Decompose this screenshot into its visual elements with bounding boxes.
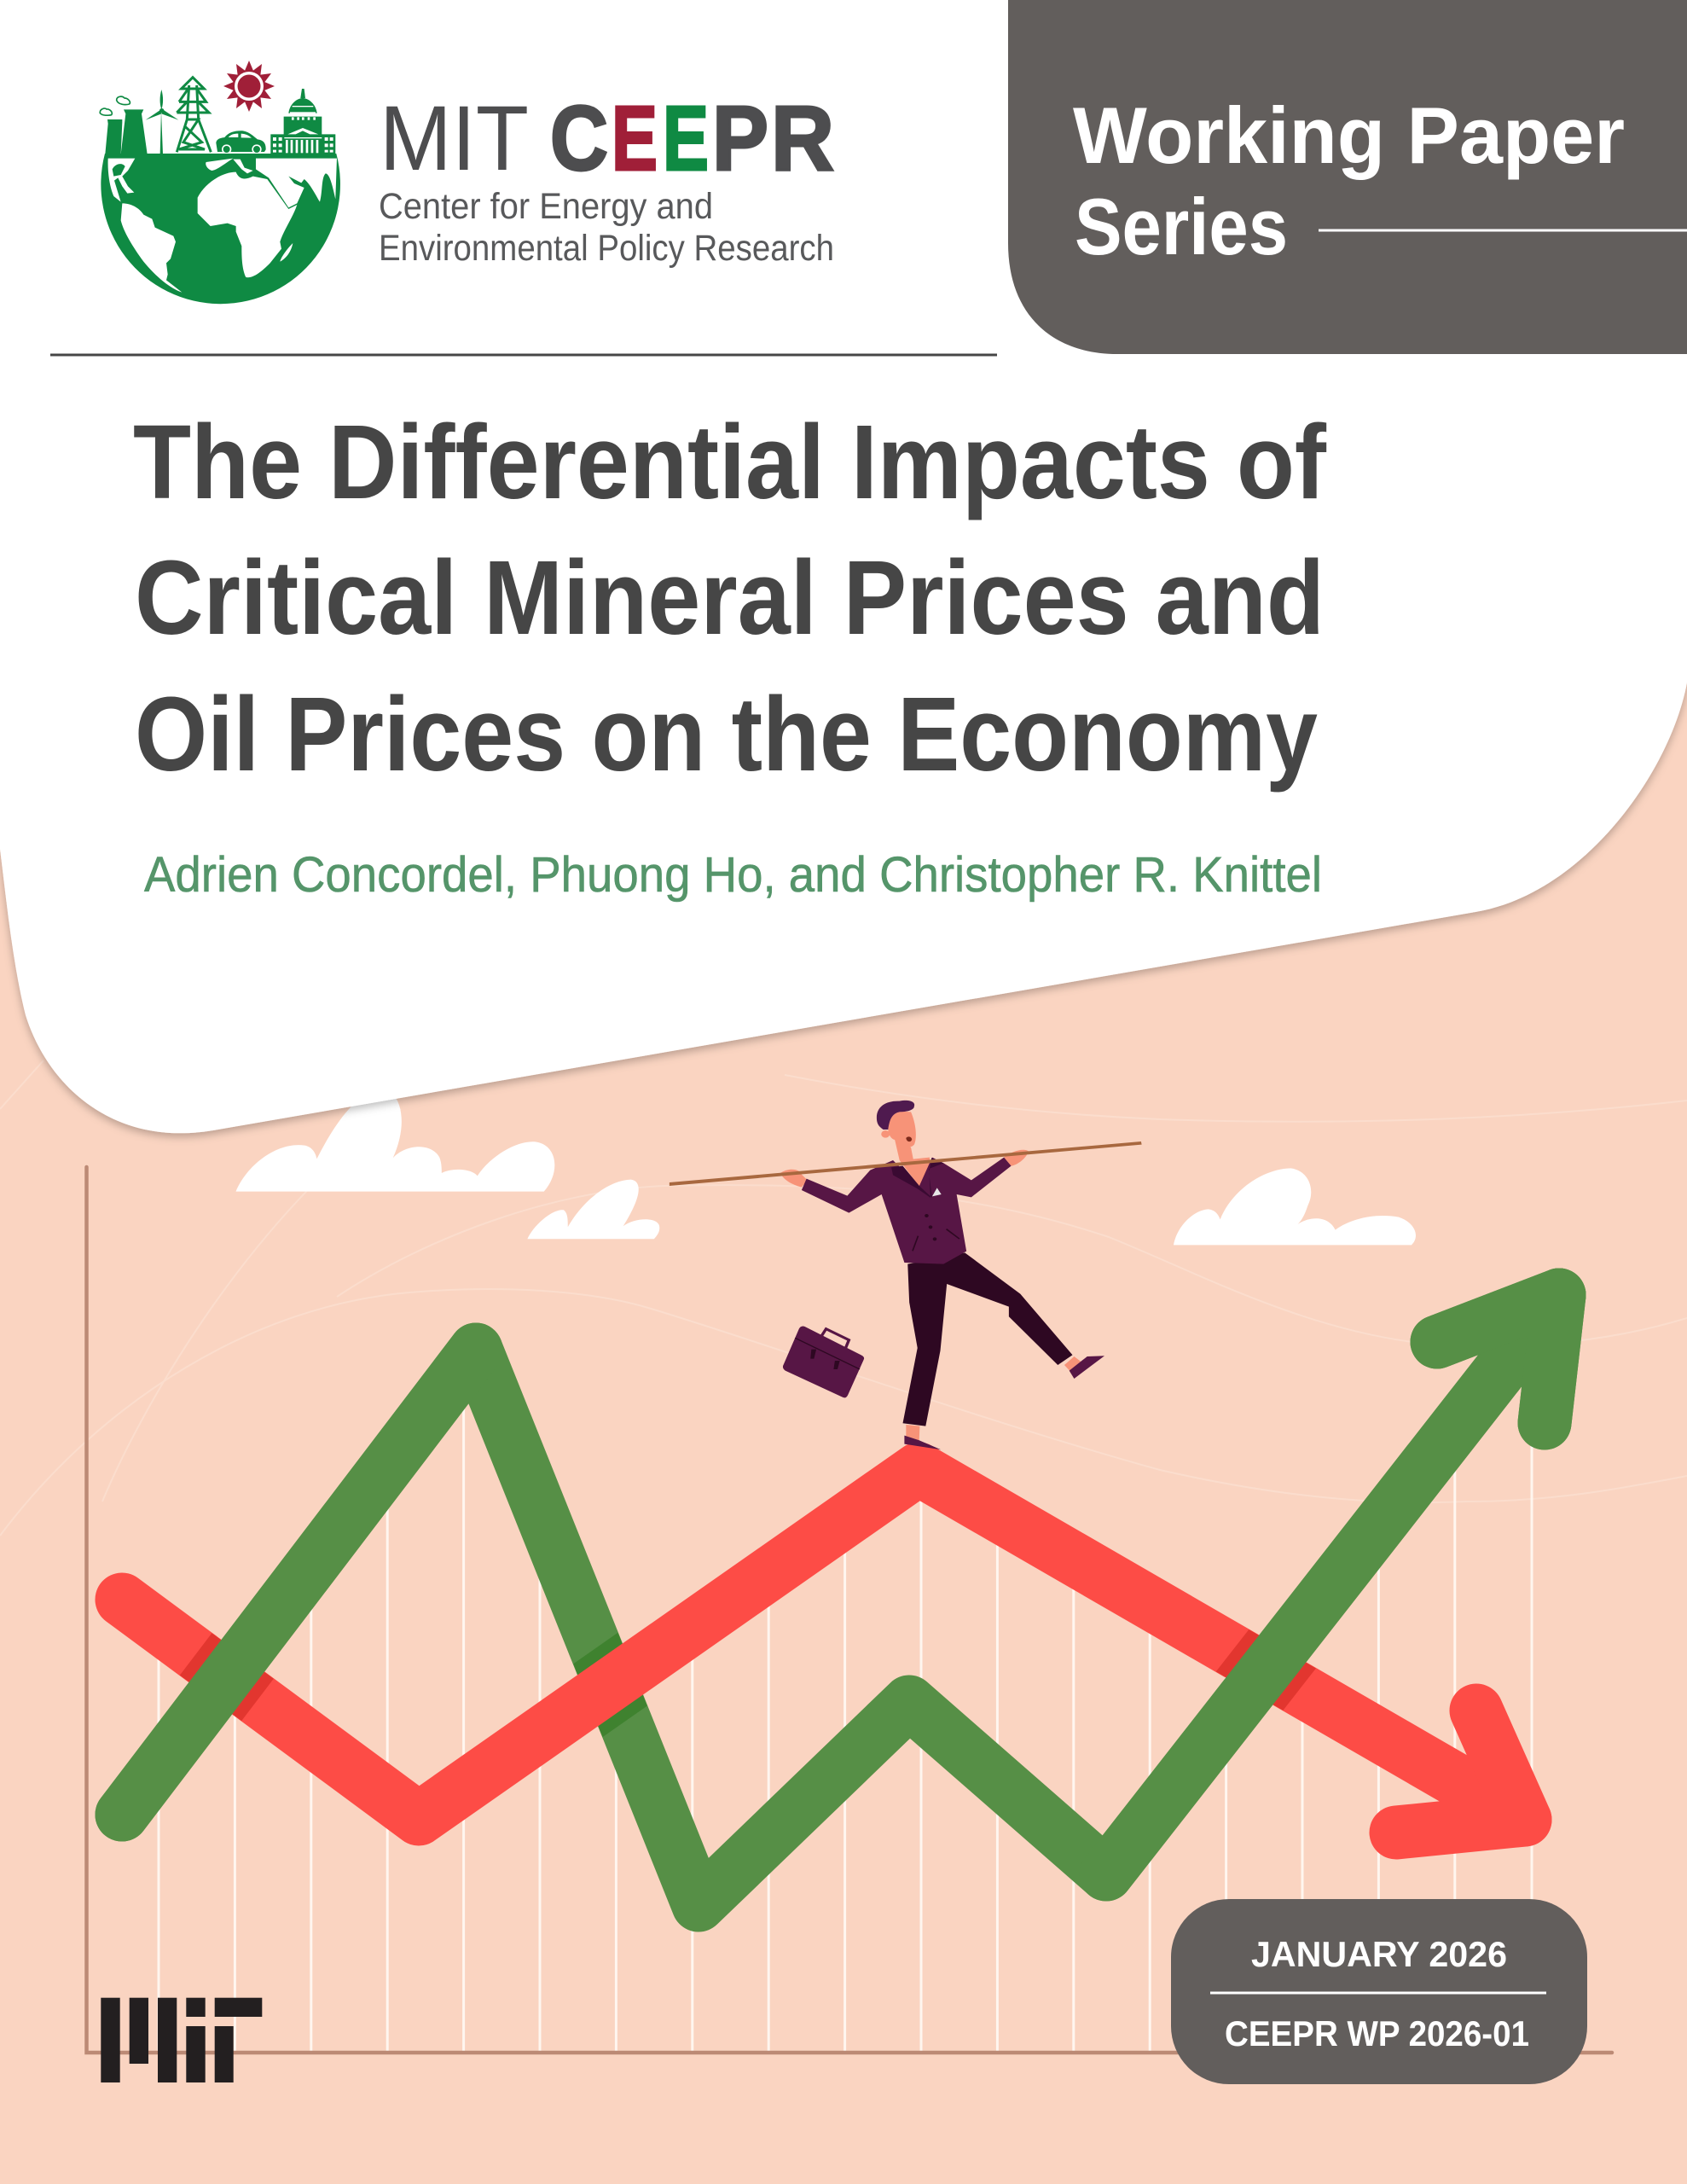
- hands: [780, 1170, 808, 1188]
- wordmark: CEEPR: C: [550, 86, 608, 189]
- chart grid lines: [159, 1367, 1532, 2051]
- MIT logo: [101, 1998, 262, 2082]
- chart axes: [87, 1167, 1612, 2053]
- header divider: [50, 353, 997, 357]
- crossing shadow on green: [573, 1633, 647, 1737]
- wordmark: CEEPR: P: [712, 86, 768, 189]
- series label: Working Paper: [1073, 90, 1625, 180]
- authors: Adrien Concordel, Phuong Ho, and Christopher R. Knittel: [144, 847, 1322, 903]
- wordmark: CEEPR: E: [663, 86, 709, 189]
- white header panel: [0, 0, 1687, 1133]
- working paper series panel: [1008, 0, 1687, 354]
- cloud: small: [527, 1180, 659, 1239]
- neck and face: [895, 1139, 930, 1187]
- faint background curves: [0, 1060, 1687, 1536]
- date: JANUARY 2026: [1251, 1934, 1507, 1974]
- series label: Series: [1075, 182, 1288, 271]
- lapels: [891, 1158, 943, 1198]
- green arrow line, crossing segments: [122, 1295, 1559, 1874]
- title: The Differential Impacts of: [133, 404, 1327, 521]
- title: Critical Mineral Prices and: [135, 540, 1325, 657]
- paper number: CEEPR WP 2026-01: [1225, 2013, 1529, 2053]
- legs: [906, 1425, 919, 1441]
- jacket: [802, 1158, 1012, 1264]
- balancing pole: [670, 1141, 1142, 1186]
- cloud: right: [1174, 1168, 1416, 1245]
- center name: [379, 186, 834, 269]
- chart: [87, 1167, 1612, 2053]
- cloud: left: [236, 1092, 554, 1192]
- crossing shadow on red: [180, 1629, 1316, 1721]
- icon: globe: [101, 154, 340, 304]
- wordmark: MIT: [380, 86, 529, 189]
- logo: MIT CEEPR: [100, 61, 834, 304]
- hair: [877, 1101, 914, 1130]
- green line, full: [122, 1295, 1559, 1905]
- title: [133, 404, 1327, 793]
- briefcase: [783, 1327, 864, 1397]
- date badge: [1171, 1899, 1587, 2084]
- person balancing: [670, 1101, 1142, 1449]
- title: Oil Prices on the Economy: [135, 677, 1318, 793]
- center name: Center for Energy and: [379, 186, 713, 227]
- icon: sun: [223, 61, 275, 112]
- center name: Environmental Policy Research: [379, 228, 834, 269]
- red arrow line: [122, 1469, 1525, 1833]
- wordmark: CEEPR: R: [771, 86, 834, 189]
- icon: skyline: [100, 78, 335, 154]
- series label: [1073, 90, 1687, 271]
- wordmark: CEEPR: E: [612, 86, 658, 189]
- shoes: [904, 1436, 941, 1449]
